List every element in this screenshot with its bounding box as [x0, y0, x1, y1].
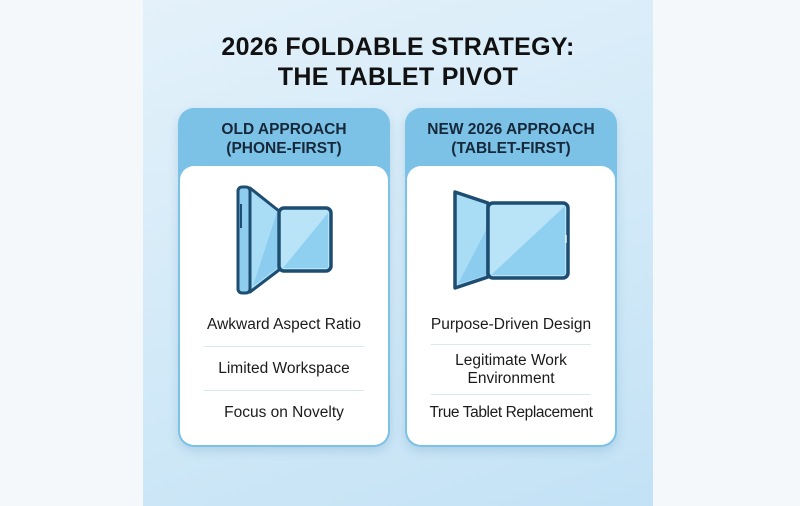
text: focus on novelty: Focus on Novelty: [224, 404, 344, 421]
text: limited workspace: Limited Workspace: [218, 360, 350, 377]
heading: old approach: (PHONE-FIRST): [226, 140, 342, 157]
heading: new approach: NEW 2026 APPROACH: [427, 121, 595, 138]
heading: new approach: [427, 121, 595, 157]
panel: new approach: [405, 108, 617, 447]
title: THE TABLET PIVOT: [278, 63, 518, 91]
heading: new approach: (TABLET-FIRST): [451, 140, 571, 157]
text: legitimate work environment: Environment: [467, 370, 554, 387]
icon: tablet-first foldable: [453, 190, 570, 290]
text: purpose-driven design: Purpose-Driven Design: [431, 316, 591, 333]
panel: old approach: [178, 108, 390, 447]
text: legitimate work environment: Legitimate Work: [455, 352, 567, 369]
text: true tablet replacement: True Tablet Replacement: [429, 404, 593, 421]
icon: phone-first foldable: [236, 186, 333, 294]
title: [221, 33, 575, 91]
heading: old approach: OLD APPROACH: [221, 121, 347, 138]
heading: old approach: [221, 121, 347, 157]
title: 2026 FOLDABLE STRATEGY:: [221, 33, 575, 61]
text: awkward aspect ratio: Awkward Aspect Ratio: [207, 316, 361, 333]
text: legitimate work environment: [455, 352, 567, 387]
